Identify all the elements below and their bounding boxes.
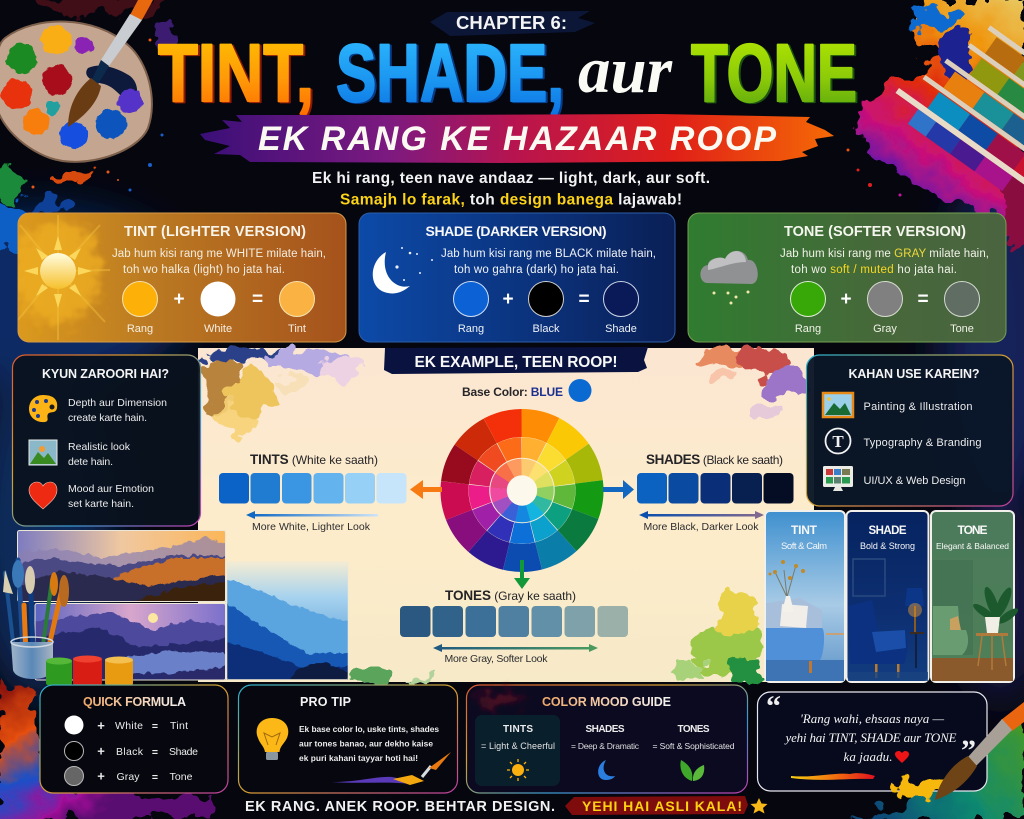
panel: kyun zaroori hai: [12, 355, 200, 526]
arrow: to tints: [410, 480, 442, 499]
quote marks: [766, 690, 976, 767]
row: black: =: [152, 746, 158, 758]
text: painting: Painting & Illustration: [864, 401, 972, 413]
chapter label: [430, 11, 595, 36]
formula: [790, 282, 980, 335]
label: SHADE: [868, 525, 907, 537]
title: SHADE,: [336, 28, 564, 119]
tagline: Samajh lo farak, toh design banega lajawab!: [340, 192, 682, 208]
row: white: White: [115, 720, 143, 732]
heading: COLOR MOOD GUIDE: [542, 695, 671, 709]
formula: Rang: [795, 323, 821, 335]
formula: Shade: [605, 323, 637, 335]
label: [936, 523, 1009, 551]
icon: heart small: [895, 751, 909, 763]
column: shades: [571, 724, 640, 780]
paint splash: cream top left: [203, 348, 369, 438]
row: black: Black: [116, 746, 144, 758]
paint splash: bottom left: [0, 682, 212, 819]
row: gray: +: [97, 768, 105, 784]
quote text: ka jaadu.: [844, 749, 892, 764]
picture: blue mountains: [227, 562, 348, 680]
swatch cards: [885, 3, 1024, 219]
formula: Rang: [127, 323, 153, 335]
text: mood: [68, 483, 154, 510]
icon: picture: [29, 440, 57, 465]
paint splash: cream bottom centre: [351, 667, 432, 681]
icon: moon: [373, 247, 433, 293]
panel: quick formula: [40, 685, 228, 793]
heading: PRO TIP: [300, 695, 351, 709]
column: tones: TONES: [678, 724, 710, 735]
column: tints: [475, 715, 560, 786]
row: white: Tint: [170, 720, 188, 732]
room card: shade: [846, 511, 928, 682]
title: TINT,: [158, 28, 314, 119]
tagline: [312, 170, 710, 208]
label: [781, 523, 827, 552]
row: white: +: [97, 718, 105, 733]
picture: sunset mountains: [18, 530, 226, 602]
subtitle banner: [200, 114, 834, 163]
label: Elegant & Balanced: [936, 541, 1009, 551]
heading: KAHAN USE KAREIN?: [848, 367, 980, 381]
text: mood: set karte hain.: [68, 498, 134, 510]
description: [299, 724, 439, 763]
formula: =: [252, 289, 263, 310]
picture frames: [18, 530, 348, 680]
icon: monitor: [823, 466, 853, 491]
column: tints: TINTS: [503, 724, 533, 735]
description: aur tones banao, aur dekho kaise: [299, 738, 433, 748]
row: gray: Tone: [170, 771, 193, 783]
paint splash: top right: [855, 0, 1024, 250]
label: Bold & Strong: [860, 541, 915, 551]
heading: KYUN ZAROORI HAI?: [42, 367, 169, 381]
formula: +: [502, 289, 514, 310]
quote text: 'Rang wahi, ehsaas naya —: [800, 711, 944, 726]
background glow: [0, 170, 1024, 700]
panel: shade: [359, 213, 675, 342]
heading: example: [384, 347, 648, 374]
icon: cloud: [700, 251, 758, 304]
paint splash: cream bottom right: [670, 588, 772, 682]
paint splash: top left: [0, 0, 178, 249]
text: realistic: Realistic look: [68, 441, 131, 453]
formula: Black: [533, 323, 560, 335]
brush stroke: [791, 773, 875, 780]
paint splatter dots: [32, 38, 902, 196]
row: white: [64, 716, 188, 734]
title: TONE: [691, 28, 857, 119]
panel: kahan use karein: [806, 355, 1013, 506]
big paintbrush: [890, 702, 1024, 800]
formula: Rang: [458, 323, 484, 335]
text: depth: [68, 397, 167, 424]
row: black: Shade: [169, 746, 198, 758]
formula: Tone: [950, 323, 974, 335]
text: ui: UI/UX & Web Design: [864, 475, 966, 487]
text: depth: Depth aur Dimension: [68, 397, 167, 409]
description: Jab hum kisi rang me BLACK milate hain,: [441, 248, 656, 260]
room card: tone: [931, 511, 1020, 682]
base colour: Base Color: BLUE: [462, 385, 563, 399]
icon: sun: [14, 215, 110, 340]
column: tones: = Soft & Sophisticated: [652, 741, 735, 751]
row: gray: =: [152, 772, 158, 784]
column: tones: [652, 724, 735, 781]
paint splash: cream top right: [696, 348, 805, 418]
description: toh wo gahra (dark) ho jata hai.: [454, 264, 619, 276]
paint splash: bottom right: [855, 700, 1024, 819]
row: black: +: [97, 744, 105, 758]
text: typography: Typography & Branding: [864, 437, 982, 449]
quote text: [784, 711, 957, 764]
room: tint furniture: [766, 560, 844, 681]
text: mood: Mood aur Emotion: [68, 483, 154, 495]
formula: Tint: [288, 323, 306, 335]
icon: bulb: [257, 718, 288, 760]
chapter label: CHAPTER 6:: [456, 12, 567, 33]
room: tone furniture: [932, 560, 1020, 681]
icon: typography: [826, 428, 850, 454]
brush jar: [3, 560, 69, 679]
description: Jab hum kisi rang me GRAY milate hain,: [780, 248, 989, 260]
icon: mini brush: [332, 752, 451, 785]
formula: [122, 282, 314, 335]
column: shades: = Deep & Dramatic: [571, 741, 640, 751]
label: TONE: [958, 523, 988, 537]
column: tints: = Light & Cheerful: [481, 741, 555, 751]
title: [158, 28, 857, 119]
arrow: to shades: [603, 480, 634, 499]
shades scale: [637, 452, 794, 533]
text: depth: create karte hain.: [68, 412, 147, 424]
description: ek puri kahani tayyar hoti hai!: [299, 753, 418, 763]
row: gray: Gray: [116, 771, 140, 783]
quote text: yehi hai TINT, SHADE aur TONE: [784, 730, 957, 745]
paint palette: [0, 22, 152, 162]
formula: +: [840, 289, 852, 310]
formula: =: [917, 289, 929, 310]
formula: White: [204, 323, 232, 335]
icon: heart: [29, 482, 57, 509]
formula: Gray: [873, 323, 897, 335]
tints scale: [219, 452, 406, 533]
brush stain: [476, 693, 524, 705]
description: Jab hum kisi rang me WHITE milate hain,: [112, 248, 326, 260]
picture: purple mountains: [35, 604, 226, 680]
icon: star: [750, 798, 768, 814]
base colour: [462, 379, 592, 402]
column: shades: SHADES: [586, 724, 625, 735]
panel: pro tip: [238, 685, 458, 793]
formula: [454, 282, 638, 335]
room card: tint: [765, 511, 845, 682]
tones scale: TONES (Gray ke saath): [445, 588, 576, 603]
text: realistic: [68, 441, 131, 468]
icon: painting: [823, 393, 853, 417]
shades scale: More Black, Darker Look: [644, 521, 759, 533]
tints scale: More White, Lighter Look: [252, 521, 371, 533]
paintbrush on palette: [68, 0, 153, 127]
text: realistic: dete hain.: [68, 456, 113, 468]
heading: SHADE (DARKER VERSION): [426, 223, 606, 239]
icon: typography: T: [832, 432, 844, 451]
row: black: [64, 742, 198, 760]
panel: tone: [688, 213, 1006, 342]
icon: palette: [29, 395, 57, 422]
tones scale: More Gray, Softer Look: [444, 653, 548, 665]
tones scale: [400, 588, 628, 665]
colour wheel: [427, 395, 617, 586]
row: gray: [64, 766, 193, 786]
subtitle banner: EK RANG KE HAZAAR ROOP: [258, 120, 776, 158]
formula: =: [578, 289, 590, 310]
title: aur: [578, 34, 673, 107]
shades scale: SHADES (Black ke saath): [646, 452, 783, 467]
arrow: to tones: [514, 560, 530, 589]
tints scale: TINTS (White ke saath): [250, 452, 378, 467]
formula: +: [173, 289, 185, 310]
label: [860, 525, 915, 551]
label: Soft & Calm: [781, 541, 827, 552]
heading: TONE (SOFTER VERSION): [784, 224, 966, 240]
panel: tint: [14, 213, 346, 342]
room: shade furniture: [848, 559, 928, 681]
footer banner: YEHI HAI ASLI KALA!: [582, 798, 742, 814]
footer slogan: EK RANG. ANEK ROOP. BEHTAR DESIGN.: [245, 799, 555, 815]
tagline: Ek hi rang, teen nave andaaz — light, dark, aur soft.: [312, 170, 710, 187]
quote marks: “: [766, 690, 781, 723]
paint pots: [46, 656, 133, 685]
label: TINT: [791, 523, 818, 537]
description: [112, 248, 326, 276]
description: [441, 248, 656, 276]
heading: QUICK FORMULA: [83, 695, 186, 709]
panel: colour mood guide: [466, 685, 748, 793]
heading: TINT (LIGHTER VERSION): [124, 224, 306, 240]
quote marks: ”: [961, 734, 976, 767]
panel: quote: [758, 690, 987, 791]
row: white: =: [152, 720, 158, 732]
description: [780, 248, 989, 276]
description: Ek base color lo, uske tints, shades: [299, 724, 439, 734]
description: toh wo halka (light) ho jata hai.: [123, 264, 285, 276]
central cream paper: [198, 348, 814, 682]
description: toh wo soft / muted ho jata hai.: [791, 264, 957, 276]
heading: example: EK EXAMPLE, TEEN ROOP!: [414, 354, 618, 371]
